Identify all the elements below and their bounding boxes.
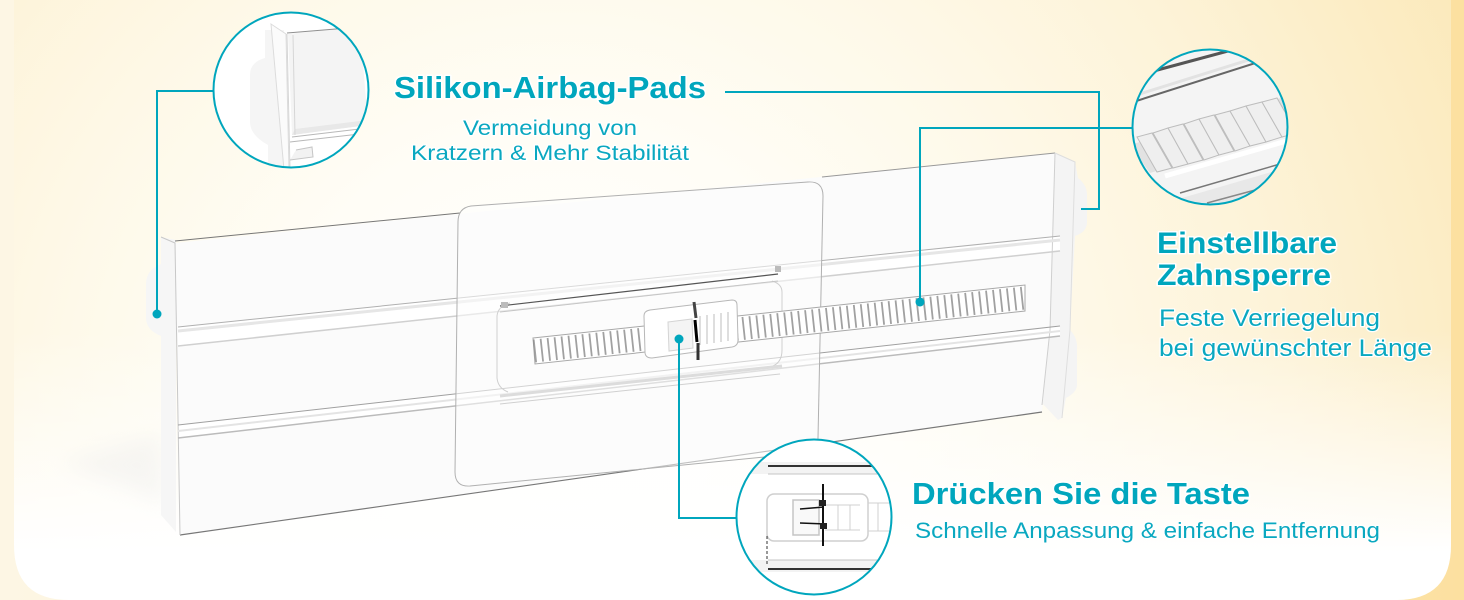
lower rail band	[178, 326, 1060, 438]
release button buckle	[644, 300, 738, 360]
heading: Einstellbare Zahnsperre: Einstellbare	[1157, 227, 1337, 260]
text: Silikon-Airbag-Pads description	[411, 117, 689, 165]
slider housing	[497, 266, 782, 404]
leader lines and dots	[152, 91, 1133, 518]
text: Taste description: Schnelle Anpassung & einfache Entfernung	[915, 518, 1380, 543]
divider outlines	[161, 153, 1075, 535]
anchor dots	[152, 298, 924, 344]
text: Silikon-Airbag-Pads description: Vermeidung von	[463, 117, 637, 140]
right silicone pad	[1042, 153, 1087, 420]
leader: push button	[679, 340, 736, 518]
text: Silikon-Airbag-Pads description: Kratzern & Mehr Stabilität	[411, 142, 689, 165]
text: Zahnsperre description: bei gewünschter Länge	[1159, 335, 1432, 362]
leader: silicone pads, right	[725, 92, 1099, 209]
leader: tooth lock	[920, 128, 1133, 302]
product shadow	[60, 434, 165, 505]
detail circle: silicone pad	[213, 12, 369, 170]
detail circle: push button	[735, 439, 895, 595]
text: Zahnsperre description: Feste Verriegelung	[1159, 305, 1380, 332]
upper rail band	[178, 236, 1060, 346]
detail circle: tooth lock	[1130, 47, 1297, 210]
divider face	[175, 153, 1055, 535]
heading: Silikon-Airbag-Pads: Silikon-Airbag-Pads	[394, 70, 706, 105]
heading: Einstellbare Zahnsperre	[1157, 227, 1337, 292]
product: adjustable drawer divider	[146, 153, 1087, 535]
leader: silicone pads, left	[157, 91, 213, 314]
left silicone pad	[146, 237, 176, 532]
heading: Einstellbare Zahnsperre: Zahnsperre	[1157, 259, 1331, 292]
centre sliding panel	[455, 182, 823, 486]
toothed rack	[533, 285, 1025, 364]
heading: Drücken Sie die Taste: Drücken Sie die Taste	[912, 476, 1250, 511]
text: Zahnsperre description	[1159, 305, 1432, 362]
